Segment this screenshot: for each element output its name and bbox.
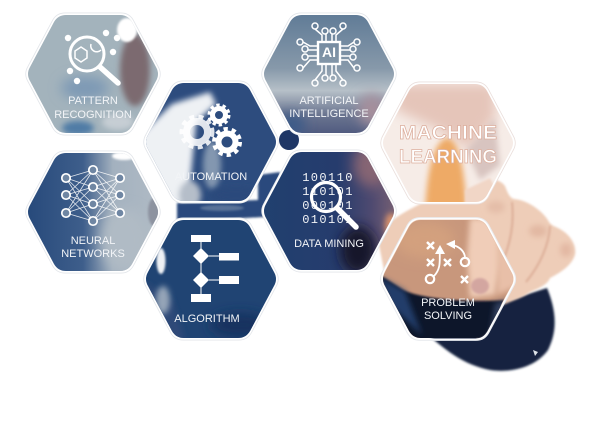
label: machine learning: LEARNING: [399, 147, 497, 168]
label: data mining: DATA MINING: [294, 238, 364, 250]
label: artificial intelligence: [289, 95, 369, 120]
hexagon: artificial intelligence: [260, 10, 400, 140]
hexagon: data mining: [261, 150, 397, 272]
digits: [302, 171, 354, 227]
digits: 010101: [302, 213, 354, 227]
label: machine learning: [399, 123, 497, 168]
icon: AI chip circuit: [297, 23, 360, 86]
digits: 100110: [302, 171, 354, 185]
label: problem solving: [421, 297, 475, 322]
label: automation: AUTOMATION: [175, 171, 247, 183]
icon: flowchart: [191, 235, 239, 302]
hexagon: algorithm: [143, 218, 279, 340]
hexagon: problem solving: [380, 217, 516, 341]
label: pattern recognition: PATTERN: [68, 95, 118, 107]
icon: magnifier: [312, 182, 356, 227]
hexagon: neural networks: [25, 150, 161, 274]
label: problem solving: SOLVING: [424, 310, 472, 322]
label: neural networks: NEURAL: [71, 235, 115, 247]
icon: neural network: [62, 166, 124, 225]
label: problem solving: PROBLEM: [421, 297, 475, 309]
label: neural networks: NETWORKS: [61, 248, 125, 260]
label: neural networks: [61, 235, 125, 260]
icon: strategy play: [426, 240, 469, 283]
label: artificial intelligence: INTELLIGENCE: [289, 108, 369, 120]
hexagon: machine learning: [380, 80, 520, 210]
photo: pointing hand and sleeve behind the hexagons: [177, 130, 575, 371]
label: artificial intelligence: ARTIFICIAL: [299, 95, 359, 107]
label: algorithm: ALGORITHM: [174, 313, 240, 325]
label: pattern recognition: [54, 95, 132, 121]
icon: gears: [182, 105, 240, 155]
label: pattern recognition: RECOGNITION: [54, 109, 132, 121]
digits: 110101: [302, 185, 354, 199]
hexagon: pattern recognition: [25, 12, 161, 136]
digits: 000101: [302, 199, 354, 213]
hexagon: automation: [143, 80, 279, 204]
hexagon: artificial intelligence: AI: [322, 44, 336, 60]
icon: magnifier with pattern dots: [65, 30, 120, 84]
label: machine learning: MACHINE: [399, 123, 497, 144]
